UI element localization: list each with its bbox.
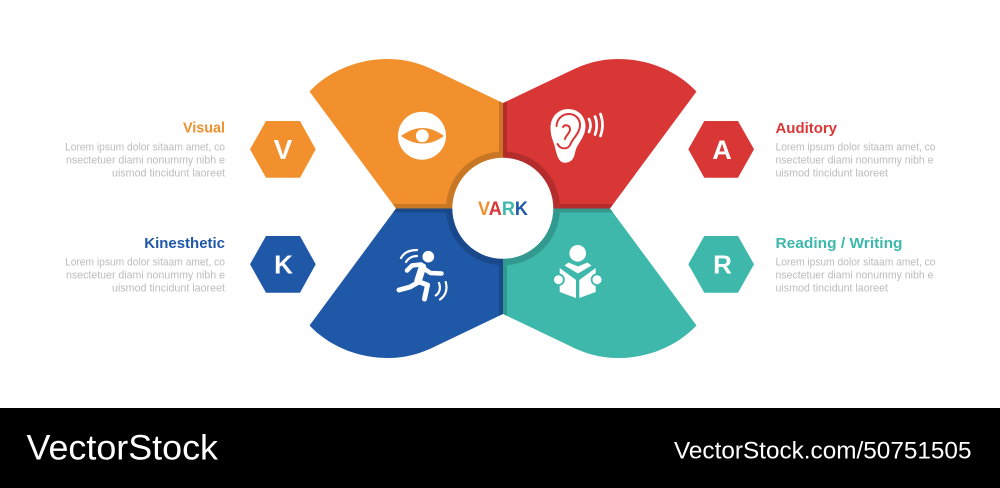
text block: Kinesthetic xyxy=(65,236,225,295)
icon: ear with sound waves xyxy=(550,109,602,163)
footer bar xyxy=(0,408,1000,488)
text block: Kinesthetic: Lorem ipsum dolor sitaam amet, co xyxy=(65,256,225,268)
hexagon: V xyxy=(250,121,316,178)
text block: Reading / Writing xyxy=(776,236,936,295)
footer brand: VectorStock xyxy=(26,428,219,468)
center label: VARK: VARK xyxy=(478,198,528,220)
hexagon: R xyxy=(688,236,754,293)
text block: Auditory: Auditory xyxy=(776,121,837,137)
text block: Visual: nsectetuer diami nonummy nibh e xyxy=(66,154,225,166)
hexagon: R: R xyxy=(713,249,732,279)
panel: Reading / Writing petal xyxy=(503,208,696,358)
text block: Reading / Writing: uismod tincidunt laoreet xyxy=(776,283,888,295)
panel: Visual petal xyxy=(310,59,503,208)
text block: Visual: uismod tincidunt laoreet xyxy=(112,168,225,180)
text block: Auditory xyxy=(776,121,936,180)
icon: eye xyxy=(398,112,446,160)
text block: Visual: Visual xyxy=(183,121,225,137)
hexagon: A xyxy=(688,121,754,178)
text block: Reading / Writing: nsectetuer diami nonummy nibh e xyxy=(776,270,934,282)
text block: Kinesthetic: uismod tincidunt laoreet xyxy=(112,283,225,295)
hexagon: K: K xyxy=(274,249,293,279)
panel: Auditory petal xyxy=(503,59,696,208)
icon: person reading a book xyxy=(552,245,603,298)
text block: Auditory: uismod tincidunt laoreet xyxy=(776,168,888,180)
center circle xyxy=(452,158,553,259)
cross and ring shadow xyxy=(392,101,614,316)
hexagon: A: A xyxy=(712,135,732,165)
footer url: VectorStock.com/50751505 xyxy=(674,438,972,464)
icon: running person with motion arcs xyxy=(399,250,446,300)
text block: Kinesthetic: Kinesthetic xyxy=(144,236,225,252)
text block: Visual xyxy=(65,121,225,180)
text block: Auditory: Lorem ipsum dolor sitaam amet, co xyxy=(776,141,936,153)
panel: Kinesthetic petal xyxy=(310,208,503,358)
text block: Kinesthetic: nsectetuer diami nonummy nibh e xyxy=(66,270,225,282)
text block: Reading / Writing: Reading / Writing xyxy=(776,236,902,252)
hexagon: V: V xyxy=(274,134,293,165)
text block: Auditory: nsectetuer diami nonummy nibh e xyxy=(776,154,934,166)
text block: Reading / Writing: Lorem ipsum dolor sitaam amet, co xyxy=(776,256,936,268)
text block: Visual: Lorem ipsum dolor sitaam amet, co xyxy=(65,141,225,153)
hexagon: K xyxy=(250,236,316,293)
